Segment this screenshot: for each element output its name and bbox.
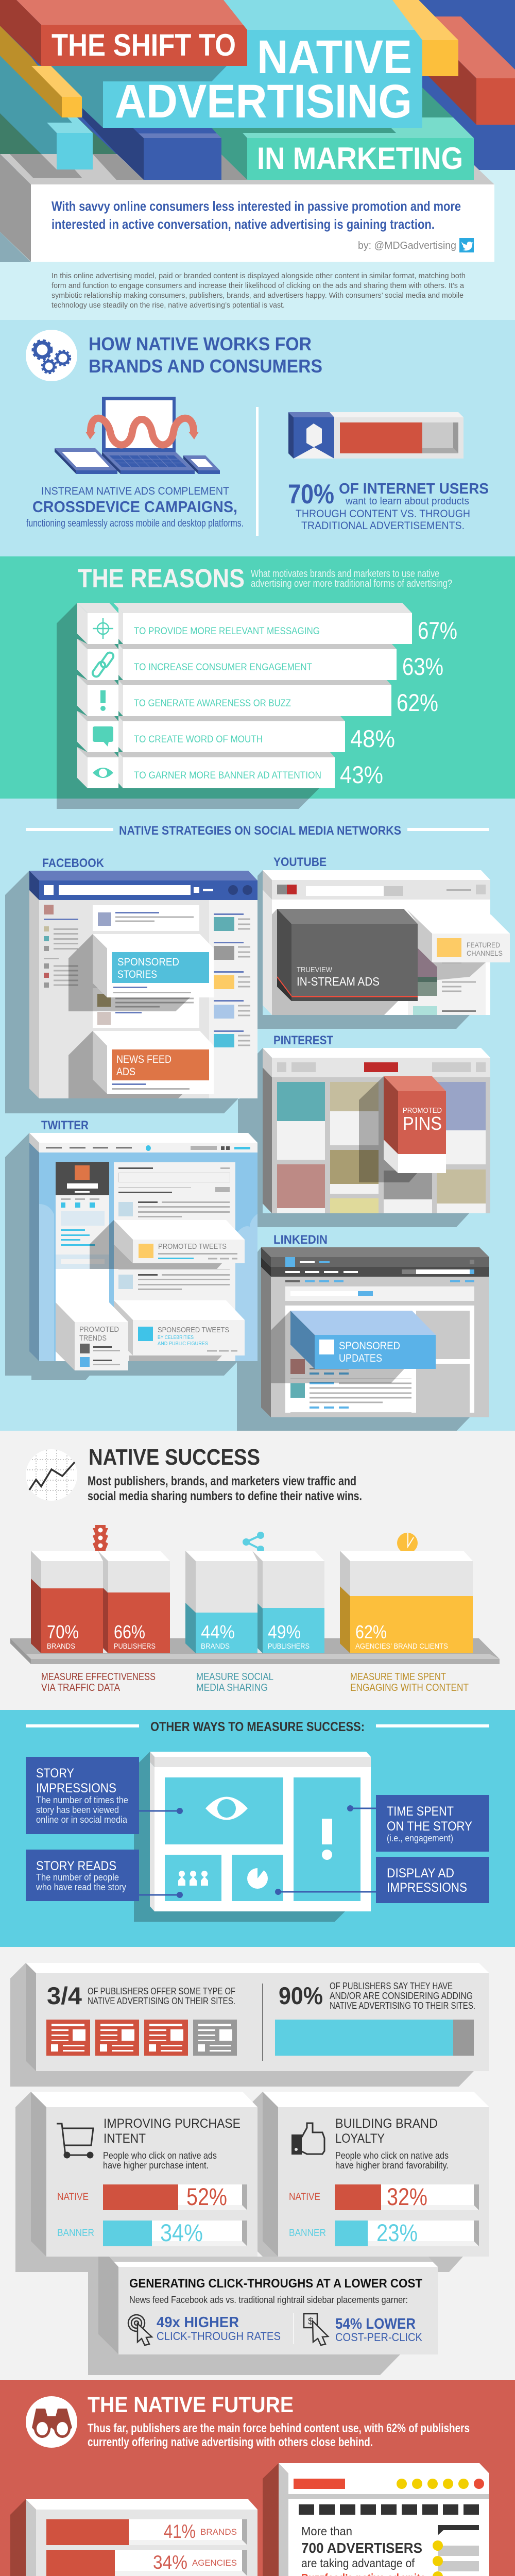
stat: 49x higher: 49x HIGHER [157,2314,239,2331]
bar values: 63% [402,653,443,680]
chart: platform base [10,1638,500,1664]
icon: share nodes [243,1532,264,1553]
callout: story impressions: The number of times the [36,1795,128,1805]
heading [335,2116,438,2146]
chart: time spent column: 62% [355,1621,387,1642]
panel: publisher statistics [10,1963,489,2087]
stat: 3/4 of publishers [47,1982,235,2009]
label: YOUTUBE [273,855,327,869]
callout: story impressions: STORY [36,1766,74,1781]
panel: currently use native advertising: 34% [153,2552,187,2573]
heading: BUILDING BRAND [335,2116,438,2131]
text [335,2150,449,2171]
callout: sponsored updates: SPONSORED [339,1340,400,1352]
icon: target cursor [128,2315,152,2345]
callout: sponsored tweets: SPONSORED TWEETS [158,1326,229,1334]
bar labels [134,626,321,781]
stat: 54% lower: 54% LOWER [335,2316,416,2332]
callout: sponsored tweets [114,1300,245,1355]
text: have higher brand favorability. [335,2160,449,2171]
caption: social sharing: MEDIA SHARING [196,1682,268,1693]
panel: native success [10,1445,500,1693]
bar chart: purchase intent: BANNER [57,2228,94,2239]
callout: news feed ads: ADS [116,1066,135,1078]
stat: 70% of internet users: want to learn about products [345,496,469,507]
stat: 70% of internet users: THROUGH CONTENT VS. THROUGH [296,508,470,520]
caption: social sharing [196,1671,273,1693]
text block: definition paragraph: symbiotic relationship making consumers, publishers, brands, and advertisers happy. With consumers’ social media and mobile [52,291,464,300]
chart: social sharing column: PUBLISHERS [268,1642,310,1651]
text block: definition paragraph: form and function to engage consumers and increase their likelihood of clicking on the ads and sharing them with others. It’s a [52,281,465,290]
callout: time spent on the story [347,1795,489,1852]
panel: buzzfeed browser [263,2463,489,2576]
callout: promoted trends: TRENDS [79,1334,107,1343]
stat: 70% of internet users [288,479,489,532]
callout: story impressions: story has been viewed [36,1805,119,1815]
icon: crosshair target [93,618,113,639]
bar chart: brand loyalty: 23% [376,2219,418,2246]
icon: person beside content ad [288,412,464,459]
callout: news feed ads [93,1031,214,1094]
icon: people [178,1871,208,1886]
heading: THE NATIVE FUTURE [88,2393,294,2417]
bar chart: purchase intent: 52% [186,2183,227,2210]
panel: twitter [5,1118,258,1380]
icon: eye [93,768,113,778]
label: TWITTER [41,1118,89,1132]
chart: traffic data column: 70% [47,1621,79,1642]
icon: exclamation mark [100,690,106,711]
stat: 90% of publishers [279,1981,475,2011]
stat: 49x higher: CLICK-THROUGH RATES [157,2330,281,2343]
text: People who click on native ads [103,2150,217,2161]
bar values: 43% [340,761,383,788]
stat: 3/4 of publishers: OF PUBLISHERS OFFER SOME TYPE OF [88,1986,235,1996]
intro text [88,1474,362,1503]
title: IN MARKETING [257,141,463,176]
panel: brand loyalty [263,2092,489,2257]
intro text: currently offering native advertising with others close behind. [88,2435,373,2449]
text: People who click on native ads [335,2150,449,2161]
text: have higher purchase intent. [103,2160,209,2171]
bar chart: brand loyalty: NATIVE [289,2192,320,2202]
callout: sponsored stories: STORIES [117,969,157,980]
heading: INTENT [104,2131,146,2146]
panel: linkedin [237,1233,489,1431]
callout: display ad impressions [275,1857,489,1903]
panel: how native works [26,330,489,536]
chart: traffic data column [31,1525,170,1653]
text: crossdevice campaigns [26,485,244,529]
panel: header isometric title art [0,0,515,262]
heading: OTHER WAYS TO MEASURE SUCCESS: [150,1720,365,1734]
icon: chain link [91,651,115,678]
panel: currently use native advertising: BRANDS [200,2527,237,2537]
callout: promoted trends [56,1302,128,1370]
icon: twitter bird [459,238,474,252]
caption: traffic data: MEASURE EFFECTIVENESS [41,1671,156,1683]
callout: promoted trends: PROMOTED [79,1325,119,1334]
panel: facebook [5,856,258,1113]
panel: currently use native advertising [10,2499,258,2576]
caption: time spent: MEASURE TIME SPENT [350,1671,446,1683]
panel: intro card [31,184,494,262]
callout: sponsored updates: UPDATES [339,1352,382,1364]
bar labels: TO PROVIDE MORE RELEVANT MESSAGING [134,626,320,637]
text: News feed Facebook ads vs. traditional rightrail sidebar placements garner: [129,2295,408,2305]
text: crossdevice campaigns: INSTREAM NATIVE ADS COMPLEMENT [41,485,229,497]
byline: by: @MDGadvertising [358,240,456,251]
callout: promoted tweets [114,1220,245,1263]
bar values: 48% [350,725,395,752]
callout: time spent on the story: (i.e., engagement) [387,1833,453,1843]
icon: speech bubble [93,726,113,747]
bar chart: brand loyalty: 32% [387,2183,427,2210]
callout: news feed ads: NEWS FEED [116,1054,171,1065]
stat: 90% of publishers: OF PUBLISHERS SAY THEY HAVE [330,1981,453,1991]
callout: story impressions [26,1757,183,1834]
panel: other ways to measure success [26,1720,489,1922]
chart: social sharing column [185,1532,324,1653]
icon: clock pie [247,1867,268,1889]
caption: time spent: ENGAGING WITH CONTENT [350,1682,469,1693]
callout: trueview in-stream ads [277,909,418,1001]
heading: NATIVE STRATEGIES ON SOCIAL MEDIA NETWORKS [119,824,401,838]
callout: story reads: The number of people [36,1872,119,1883]
callout: sponsored tweets: BY CELEBRITIES [158,1334,194,1341]
label: FACEBOOK [42,856,105,870]
callout: trueview in-stream ads: TRUEVIEW [297,965,333,974]
callout: featured channels [407,909,510,962]
icon: line chart in circle [26,1449,77,1501]
bar labels: TO INCREASE CONSUMER ENGAGEMENT [134,662,312,673]
title: NATIVE [257,31,412,83]
text block: definition paragraph: technology use steadily on the rise, native advertising’s potential is vast. [52,301,285,310]
chart: social sharing column: BRANDS [201,1642,230,1651]
label: LINKEDIN [273,1233,328,1247]
callout: sponsored updates [290,1311,436,1369]
callout: story reads: who have read the story [36,1882,126,1892]
callout: story impressions: online or in social media [36,1815,128,1825]
heading: IMPROVING PURCHASE [104,2116,241,2131]
callout: featured channels: CHANNELS [467,949,503,957]
subheading question: advertising over more traditional forms of advertising? [251,578,452,589]
bar chart: reasons [77,603,457,788]
panel: the reasons [57,564,457,809]
icon: thumbs up [291,2123,324,2155]
caption: traffic data [41,1671,156,1693]
callout: sponsored stories [93,934,214,997]
chart: traffic data column: BRANDS [47,1642,75,1651]
panel: purchase intent [31,2092,258,2257]
intro statement: interested in active conversation, native advertising is gaining traction. [52,216,435,232]
callout: display ad impressions: DISPLAY AD [387,1866,454,1880]
bar chart: brand loyalty [289,2183,479,2246]
label: PINTEREST [273,1033,333,1047]
caption: time spent [350,1671,469,1693]
stat: 90% of publishers: 90% [279,1982,323,2009]
arrow: wave between devices [85,418,199,445]
callout: story impressions: IMPRESSIONS [36,1781,116,1795]
stat: 54% lower: COST-PER-CLICK [335,2331,422,2344]
subheading question: What motivates brands and marketers to use native [251,568,439,580]
bar: 90 percent [275,2020,474,2056]
heading [89,333,322,377]
heading: LOYALTY [335,2131,385,2146]
stat: 49x higher [157,2314,281,2343]
panel: youtube [258,855,510,1029]
heading: GENERATING CLICK-THROUGHS AT A LOWER COST [129,2277,422,2291]
chart: traffic data column: PUBLISHERS [114,1642,156,1651]
callout: time spent on the story: ON THE STORY [387,1819,472,1834]
text: 700 advertisers: are taking advantage of [301,2556,415,2570]
bar values [340,617,457,788]
stat: 90% of publishers: AND/OR ARE CONSIDERING ADDING [330,1991,473,2001]
callout: sponsored tweets: AND PUBLIC FIGURES [158,1341,208,1347]
callout: promoted pins: PINS [403,1113,442,1134]
callout: trueview in-stream ads: IN-STREAM ADS [297,975,380,988]
icon row: newspapers three of four [46,2020,237,2056]
chart: social sharing column: 44% [201,1621,235,1642]
callout: display ad impressions: IMPRESSIONS [387,1880,467,1895]
intro text [88,2421,470,2449]
subheading question [251,568,452,589]
stat: 3/4 of publishers: 3/4 [47,1982,82,2009]
icon: exclamation [322,1819,332,1860]
icon: clock [397,1533,418,1553]
bar labels: TO CREATE WORD OF MOUTH [134,734,263,745]
panel: click-throughs at lower cost [98,2257,438,2354]
text block: definition paragraph [52,272,466,310]
text block: definition paragraph: In this online advertising model, paid or branded content is displayed alongside other content in similar format, matching both [52,272,466,280]
stat: 70% of internet users: OF INTERNET USERS [339,481,489,497]
heading: HOW NATIVE WORKS FOR [89,333,312,354]
icon: dollar cursor [304,2314,328,2345]
bar labels: TO GARNER MORE BANNER AD ATTENTION [134,770,321,781]
callout: featured channels: FEATURED [467,941,500,949]
chart: social sharing column: 49% [268,1621,301,1642]
text: 700 advertisers [301,2524,428,2576]
heading: THE REASONS [78,564,245,593]
icon: dollar cursor: $ [308,2316,314,2327]
callout: promoted pins: PROMOTED [403,1106,442,1115]
text: crossdevice campaigns: functioning seamlessly across mobile and desktop platforms. [26,518,244,529]
chart: traffic data column: 66% [114,1621,145,1642]
callout: story reads [26,1850,183,1901]
heading: BRANDS AND CONSUMERS [89,355,322,377]
callout: promoted pins [384,1076,446,1173]
bar values: 67% [418,617,457,644]
tablet illustration [134,1752,371,1922]
intro text: social media sharing numbers to define their native wins. [88,1489,362,1503]
text: 700 advertisers: 700 ADVERTISERS [301,2540,422,2556]
caption: traffic data: VIA TRAFFIC DATA [41,1682,121,1693]
stat: 3/4 of publishers: NATIVE ADVERTISING ON THEIR SITES. [88,1996,235,2006]
text: 700 advertisers: More than [301,2524,352,2538]
stat: 54% lower [335,2316,422,2344]
heading: NATIVE SUCCESS [89,1445,260,1470]
bar values: 62% [397,689,438,716]
callout: story reads: STORY READS [36,1859,116,1873]
icon: binoculars [26,2396,77,2448]
title [52,28,463,176]
chart: time spent column: AGENCIES’ BRAND CLIENTS [355,1642,448,1651]
callout: promoted tweets: PROMOTED TWEETS [158,1242,227,1251]
icon: cross device laptop tablet phone [55,397,220,474]
bar labels: TO GENERATE AWARENESS OR BUZZ [134,698,291,709]
panel: the native future [10,2393,489,2576]
stat: 70% of internet users: TRADITIONAL ADVERTISEMENTS. [301,520,465,532]
panel: pinterest [258,1033,490,1227]
title: THE SHIFT TO [52,28,236,62]
callout: time spent on the story: TIME SPENT [387,1804,454,1819]
icon: eye [205,1797,248,1820]
intro text: Most publishers, brands, and marketers view traffic and [88,1474,356,1488]
bar chart: purchase intent: NATIVE [57,2192,89,2202]
text [103,2150,217,2171]
heading [104,2116,241,2146]
icon: shopping cart [57,2124,93,2158]
chart: time spent column [340,1533,473,1653]
panel: currently use native advertising: AGENCIES [192,2558,237,2568]
text: crossdevice campaigns: CROSSDEVICE CAMPAIGNS, [32,498,237,516]
stat: 70% of internet users: 70% [288,479,334,510]
panel: native strategies on social networks [5,824,510,1431]
panel: improving purchase intent, brand loyalty, click-throughs [15,2092,489,2375]
stat: 90% of publishers: NATIVE ADVERTISING TO THEIR SITES. [330,2001,475,2011]
panel: currently use native advertising: 41% [164,2521,196,2542]
icon: traffic light [93,1525,108,1551]
bar chart: purchase intent [57,2183,247,2246]
callout: sponsored stories: SPONSORED [117,956,179,968]
intro statement [52,198,461,232]
icon: gears [26,330,77,381]
bar chart: purchase intent: 34% [160,2219,203,2246]
bar chart: brand loyalty: BANNER [289,2228,326,2239]
title: ADVERTISING [115,75,412,128]
caption: social sharing: MEASURE SOCIAL [196,1671,273,1683]
